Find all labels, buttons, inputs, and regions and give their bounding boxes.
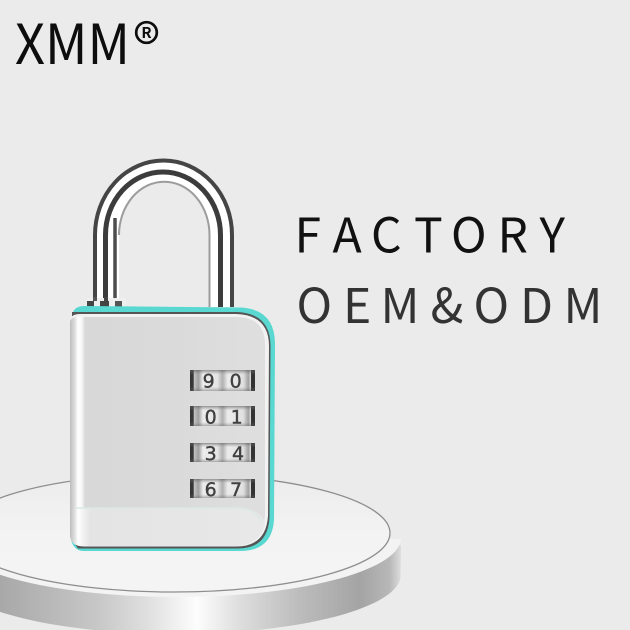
- combination dial 3 4: 4: [232, 443, 244, 465]
- display platform: [0, 474, 401, 630]
- combination dial 9 0: 0: [230, 370, 242, 392]
- combination dial 3 4: 3: [205, 443, 217, 465]
- headline: FACTORY OEM&ODM: OEM&ODM: [296, 267, 602, 337]
- dark seam: [72, 312, 270, 548]
- headline: FACTORY OEM&ODM: FACTORY: [294, 196, 566, 266]
- padlock: [70, 159, 275, 551]
- combination dial 6 7: 7: [230, 479, 242, 501]
- combination dial 6 7: 6: [205, 479, 217, 501]
- combination dial 3 4: [190, 443, 255, 465]
- combination dial 0 1: 0: [205, 406, 217, 428]
- brand logo XMM: XMM: [15, 0, 130, 80]
- combination dial 9 0: [190, 370, 255, 392]
- combination dial 6 7: [190, 479, 255, 501]
- lock face: [70, 317, 265, 546]
- teal casing: [71, 306, 275, 551]
- combination dial 9 0: 9: [203, 370, 215, 392]
- platform rim: [0, 537, 401, 597]
- shackle collar: [87, 297, 126, 307]
- lock body: [70, 314, 269, 546]
- shackle: [93, 159, 234, 307]
- lower panel: [70, 508, 265, 546]
- brand logo XMM: R: [141, 22, 152, 43]
- platform side band: [0, 537, 401, 630]
- platform top surface: [0, 474, 390, 592]
- combination dial 0 1: 1: [231, 406, 243, 428]
- headline: FACTORY OEM&ODM: [294, 196, 602, 337]
- combination dial 0 1: [190, 406, 255, 428]
